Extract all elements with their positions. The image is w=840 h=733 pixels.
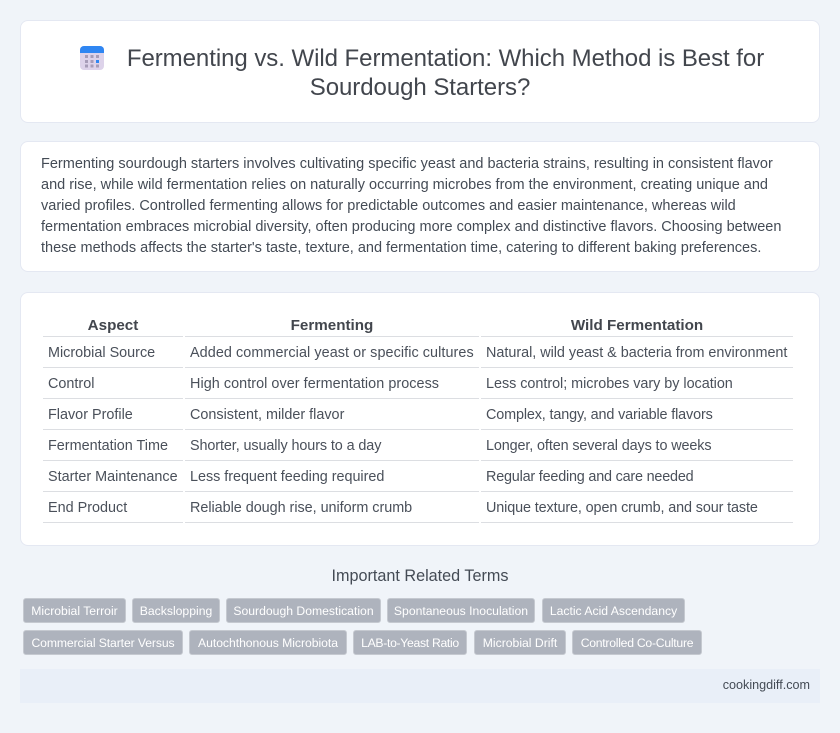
icon: calendar — [80, 46, 104, 70]
header: aspect: Aspect — [88, 317, 138, 334]
footer bar — [20, 669, 820, 703]
tag: Spontaneous Inoculation — [394, 604, 528, 618]
tag — [23, 598, 126, 623]
comparison table: Complex, tangy, and variable flavors — [486, 407, 713, 423]
tag: Autochthonous Microbiota — [198, 636, 338, 650]
tag: Lactic Acid Ascendancy — [550, 604, 677, 618]
tag: Microbial Drift — [483, 636, 557, 650]
comparison table: Regular feeding and care needed — [486, 469, 693, 485]
tag: Backslopping — [140, 604, 212, 618]
comparison table: Starter Maintenance — [48, 469, 178, 485]
summary text: varied profiles. Controlled fermenting allows for predictable outcomes and easier maintenance, whereas wild — [41, 198, 736, 214]
comparison table: Reliable dough rise, uniform crumb — [190, 500, 412, 516]
summary card — [20, 141, 820, 272]
comparison table: Microbial Source — [48, 345, 155, 361]
comparison table: Control — [48, 376, 94, 392]
comparison table: End Product — [48, 500, 127, 516]
summary text: these methods affects the starter's taste, texture, and fermentation time, catering to different baking preferences. — [41, 240, 761, 256]
tag — [189, 630, 347, 655]
tag — [572, 630, 702, 655]
comparison table: Natural, wild yeast & bacteria from environment — [486, 345, 787, 361]
comparison table: High control over fermentation process — [190, 376, 439, 392]
summary text: fermentation embraces microbial diversity, often producing more complex and distinctive flavors. Choosing between — [41, 219, 781, 235]
footer source: cookingdiff.com — [723, 678, 810, 692]
comparison table: Longer, often several days to weeks — [486, 438, 711, 454]
header: wild fermentation — [481, 317, 793, 337]
tag — [132, 598, 220, 623]
tag — [474, 630, 566, 655]
header: fermenting — [185, 317, 479, 337]
comparison table: Fermentation Time — [48, 438, 168, 454]
comparison table: Flavor Profile — [48, 407, 133, 423]
tag — [387, 598, 535, 623]
tag: LAB-to-Yeast Ratio — [361, 636, 459, 650]
tag: Commercial Starter Versus — [31, 636, 175, 650]
comparison table — [43, 317, 793, 523]
related terms heading: Important Related Terms — [332, 567, 508, 585]
summary text: and rise, while wild fermentation relies on naturally occurring microbes from the environment, creating unique and — [41, 177, 768, 193]
tag: Controlled Co-Culture — [581, 636, 693, 650]
summary text — [41, 156, 781, 256]
header: fermenting: Fermenting — [291, 317, 373, 334]
tag — [542, 598, 685, 623]
comparison table: Less control; microbes vary by location — [486, 376, 733, 392]
header: aspect — [43, 317, 183, 337]
comparison table: Unique texture, open crumb, and sour taste — [486, 500, 758, 516]
comparison table: Less frequent feeding required — [190, 469, 384, 485]
title: Sourdough Starters? — [310, 74, 530, 101]
comparison table: Added commercial yeast or specific cultures — [190, 345, 474, 361]
tag — [353, 630, 467, 655]
tag: Microbial Terroir — [31, 604, 118, 618]
table card — [20, 292, 820, 546]
comparison table: Shorter, usually hours to a day — [190, 438, 381, 454]
title: Fermenting vs. Wild Fermentation: Which Method is Best for — [127, 45, 764, 72]
tag: Sourdough Domestication — [233, 604, 374, 618]
header card — [20, 20, 820, 123]
header: wild fermentation: Wild Fermentation — [571, 317, 703, 334]
comparison table: Consistent, milder flavor — [190, 407, 344, 423]
related terms tags — [23, 598, 702, 655]
tag — [23, 630, 183, 655]
title — [127, 45, 764, 101]
tag — [226, 598, 381, 623]
summary text: Fermenting sourdough starters involves cultivating specific yeast and bacteria strains, resulting in consistent flavor — [41, 156, 773, 172]
